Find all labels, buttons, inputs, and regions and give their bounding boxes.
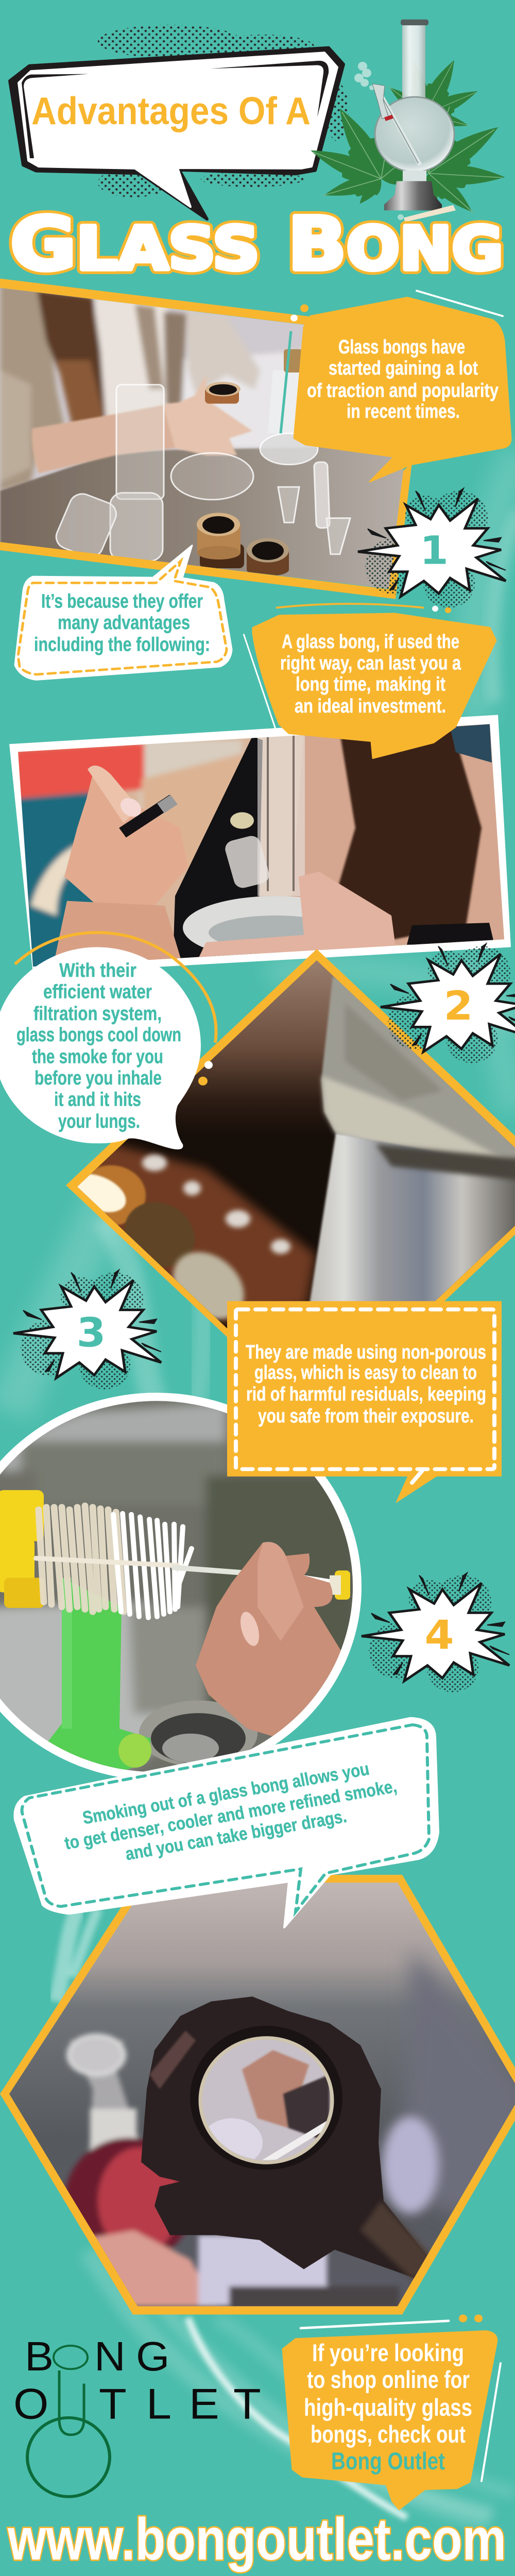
callout: shop online orange bubble <box>283 2314 501 2510</box>
logo: Bong Outlet: N <box>94 2334 126 2380</box>
glass bong pieces <box>53 385 350 561</box>
callout: water filtration circle bubble <box>0 933 216 1149</box>
blurred bong behind <box>64 2036 399 2308</box>
callout: long lasting orange bubble: an ideal investment. <box>295 696 446 717</box>
callout: water filtration circle bubble: it and it hits <box>54 1089 141 1110</box>
callout: denser smoke dashed bubble: to get denser, cooler and more refined smoke, <box>63 1776 399 1853</box>
logo: Bong Outlet: T <box>233 2380 261 2428</box>
callout: denser smoke dashed bubble: Smoking out of a glass bong allows you <box>81 1758 371 1828</box>
burst number 2 <box>381 944 515 1063</box>
callout: water filtration circle bubble: the smoke for you <box>32 1046 163 1067</box>
callout: shop online orange bubble: Bong Outlet <box>331 2448 445 2475</box>
glass bong base <box>183 896 302 955</box>
burst number 1: 1 <box>420 529 449 573</box>
right glass jar <box>260 349 318 465</box>
logo: Bong Outlet: E <box>189 2380 219 2428</box>
callout: intro orange bubble: Glass bongs have <box>338 336 465 358</box>
orange frame <box>0 279 412 599</box>
photo panel: cleaning a green bong in a sink <box>0 1393 362 1781</box>
callout: water filtration circle bubble: filtration system, <box>33 1003 162 1025</box>
callout: water filtration circle bubble: before you inhale <box>35 1067 162 1089</box>
hand <box>196 1542 344 1741</box>
callout: water filtration circle bubble: efficient water <box>43 981 152 1003</box>
candle flame <box>76 1165 146 1226</box>
right hand <box>196 872 397 964</box>
main heading: Glass Bong: BONG <box>288 202 503 287</box>
glass bong neck <box>258 735 305 896</box>
callout: long lasting orange bubble: right way, can last you a <box>280 653 461 674</box>
burst number 2: 2 <box>443 982 473 1029</box>
glass ring <box>190 2026 342 2170</box>
callout: denser smoke dashed bubble <box>14 1718 438 1927</box>
callout: water filtration circle bubble: glass bongs cool down <box>16 1024 181 1046</box>
photo panel: woman lighting a bong <box>0 715 515 974</box>
callout: advantages dashed bubble: It’s because they offer <box>41 591 203 612</box>
drain <box>139 1701 258 1767</box>
photo panel: diamond bong close-up <box>52 949 515 1421</box>
callout: long lasting orange bubble: long time, making it <box>296 673 445 695</box>
callout: denser smoke dashed bubble: and you can take bigger drags. <box>124 1806 348 1864</box>
burst number 1 <box>358 488 506 608</box>
callout: advantages dashed bubble: including the following: <box>34 634 210 655</box>
glass upper section <box>321 976 515 1178</box>
main heading: Glass Bong: BONG <box>288 202 503 287</box>
main heading: Glass Bong <box>10 202 503 287</box>
main heading: Glass Bong: GLASS <box>10 202 260 287</box>
callout: intro orange bubble <box>294 298 511 482</box>
background smoke wisps <box>10 453 515 2522</box>
callout: non-porous orange box <box>227 1301 502 1503</box>
photo panel: hexagon glass view <box>0 1875 515 2314</box>
callout: water filtration circle bubble: your lungs. <box>58 1111 140 1132</box>
decorative dots <box>198 1061 213 1086</box>
title halftone dots <box>98 25 349 197</box>
logo: Bong Outlet: T <box>99 2380 127 2428</box>
yellow sponge <box>0 1490 44 1608</box>
logo: Bong Outlet: G <box>136 2334 169 2380</box>
logo: Bong Outlet: O <box>13 2380 48 2428</box>
decorative line and dots <box>276 604 451 613</box>
callout: shop online orange bubble: If you’re looking <box>312 2340 464 2367</box>
title line: Advantages Of A: Advantages Of A <box>31 90 311 133</box>
hand with lighter <box>64 774 188 910</box>
green bong <box>43 1578 151 1772</box>
callout dots and line <box>290 291 503 321</box>
brush bristles <box>36 1505 330 1618</box>
callout: advantages dashed bubble: many advantages <box>58 612 190 634</box>
burst number 3: 3 <box>76 1310 106 1356</box>
logo: Bong Outlet: L <box>146 2380 171 2428</box>
icon: bamboo cups <box>197 382 289 576</box>
logo: Bong Outlet <box>13 2334 261 2497</box>
burst number 3 <box>13 1270 161 1389</box>
callout: intro orange bubble: in recent times. <box>347 401 460 422</box>
decorative line in photo <box>281 331 291 433</box>
burst number 4: 4 <box>424 1612 454 1658</box>
callout: water filtration circle bubble: With their <box>59 960 136 981</box>
burst number 4 <box>362 1573 509 1692</box>
logo: Bong Outlet: B <box>25 2334 54 2380</box>
main heading: Glass Bong: GLASS <box>10 202 260 287</box>
icon: glass bong with leaves <box>287 20 515 231</box>
callout: long lasting orange bubble <box>244 614 496 758</box>
callout: advantages dashed bubble <box>15 546 232 680</box>
photo panel: woman with glass pieces <box>0 278 417 599</box>
glass lower section <box>308 1132 515 1301</box>
hand holding glass <box>141 1996 438 2279</box>
title speech bubble <box>10 48 344 219</box>
